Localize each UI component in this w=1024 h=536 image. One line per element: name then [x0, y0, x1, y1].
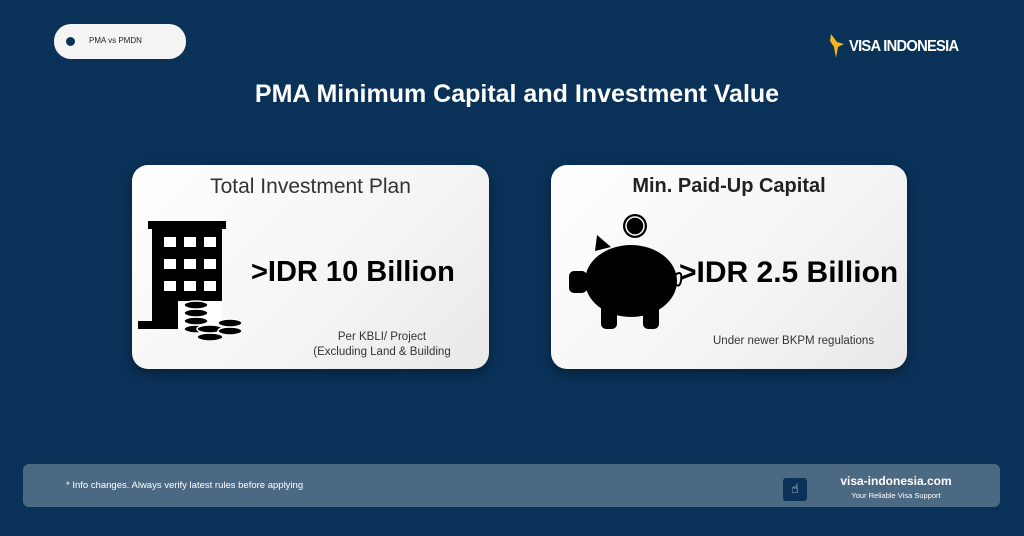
footer bar [23, 464, 1000, 507]
card heading: Total Investment Plan [210, 175, 411, 198]
pill text: PMA vs PMDN [89, 36, 142, 45]
value: >IDR 2.5 Billion [679, 256, 898, 289]
icon: hand pointer: ☝︎ [791, 482, 799, 497]
note: (Excluding Land & Building [313, 346, 451, 358]
icon: piggy bank [569, 214, 682, 329]
icon: bird [830, 34, 844, 58]
card heading: Min. Paid-Up Capital [632, 175, 826, 197]
website: visa-indonesia.com [840, 474, 952, 488]
panel: paid-up capital [551, 165, 907, 369]
logo text: VISA INDONESIA [849, 38, 958, 55]
icon: hand pointer [783, 478, 807, 501]
note: Per KBLI/ Project [338, 331, 426, 343]
logo [830, 34, 959, 58]
value: >IDR 10 Billion [251, 256, 455, 288]
tag pill [54, 24, 186, 59]
icon: building with coins [138, 221, 242, 341]
note: Under newer BKPM regulations [713, 335, 874, 347]
tagline: Your Reliable Visa Support [851, 491, 941, 500]
panel: total investment [132, 165, 489, 369]
disclaimer: * Info changes. Always verify latest rules before applying [66, 480, 303, 491]
title: PMA Minimum Capital and Investment Value [255, 80, 779, 108]
pill dot [66, 37, 75, 46]
note [313, 331, 451, 358]
